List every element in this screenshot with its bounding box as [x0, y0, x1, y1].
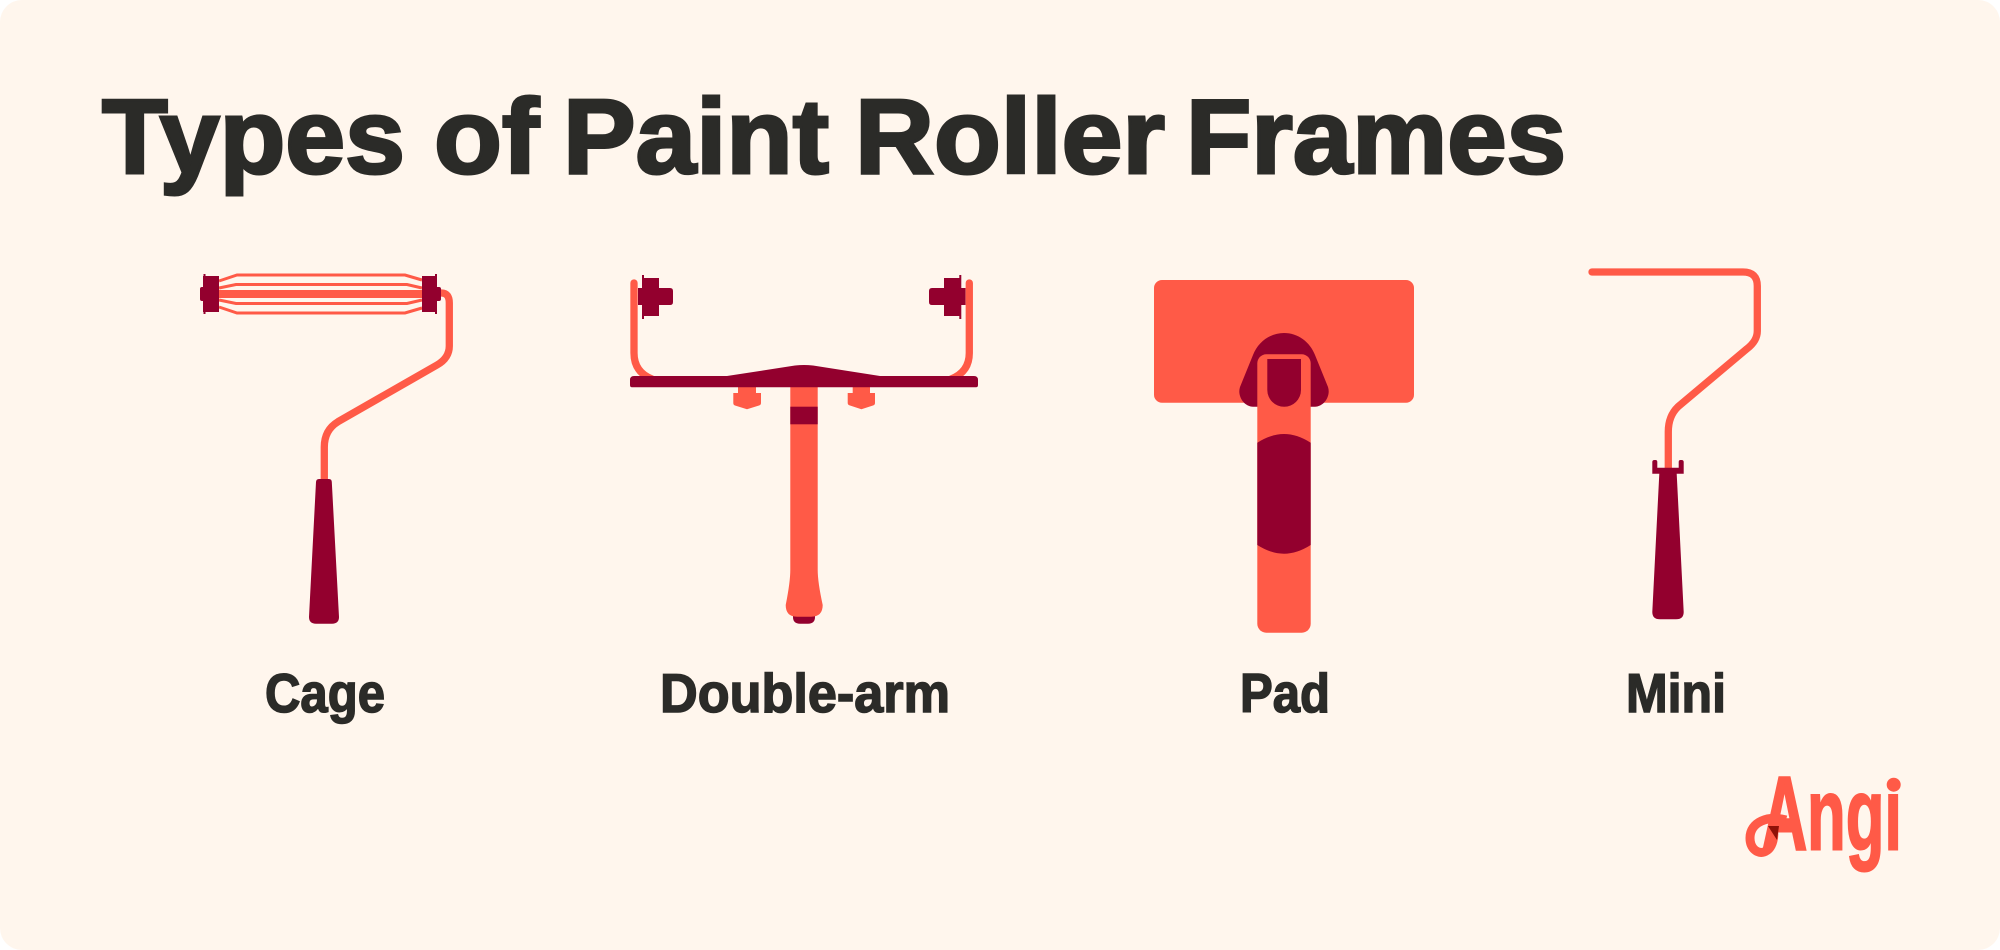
right cross bracket — [929, 275, 966, 319]
logo loop shadow — [1768, 826, 1779, 840]
left arm — [634, 283, 652, 379]
right arm — [951, 283, 969, 379]
illustration: double-arm roller frame — [630, 275, 978, 624]
crossbar — [630, 365, 978, 387]
logo loop — [1750, 818, 1786, 852]
pad clip — [1239, 333, 1329, 407]
handle grip band — [1257, 434, 1311, 554]
pad — [1154, 280, 1414, 403]
label: pad: Pad — [1240, 662, 1330, 724]
pad handle — [1257, 354, 1311, 633]
logo: Angi — [1750, 756, 1904, 872]
illustration: cage roller frame — [200, 274, 449, 624]
bottom cap — [793, 612, 815, 624]
cage wires — [219, 275, 422, 313]
illustration: mini roller frame — [1592, 272, 1757, 619]
mini handle — [1652, 460, 1684, 619]
cage handle — [309, 479, 339, 624]
logo letter A: A — [1762, 756, 1807, 872]
title: Paint — [563, 78, 829, 196]
cage end caps — [200, 274, 441, 314]
logo i dot — [1884, 768, 1904, 792]
cage wire frame — [324, 293, 449, 482]
label: mini: Mini — [1626, 662, 1726, 724]
title: Roller — [855, 78, 1165, 196]
illustration: pad frame — [1154, 280, 1414, 633]
title: Types — [102, 78, 405, 196]
title: of — [434, 78, 540, 196]
center stem — [786, 385, 823, 617]
title: Frames — [1186, 78, 1566, 196]
mini wire frame — [1592, 272, 1757, 470]
logo letters ngi: ngi — [1807, 756, 1902, 871]
stem band — [790, 407, 818, 424]
label: cage: Cage — [265, 662, 385, 724]
left and right nuts — [733, 387, 761, 409]
label: double-arm: Double-arm — [660, 662, 950, 724]
handle slot — [1267, 359, 1301, 407]
left cross bracket — [638, 275, 673, 319]
title — [102, 78, 1566, 196]
